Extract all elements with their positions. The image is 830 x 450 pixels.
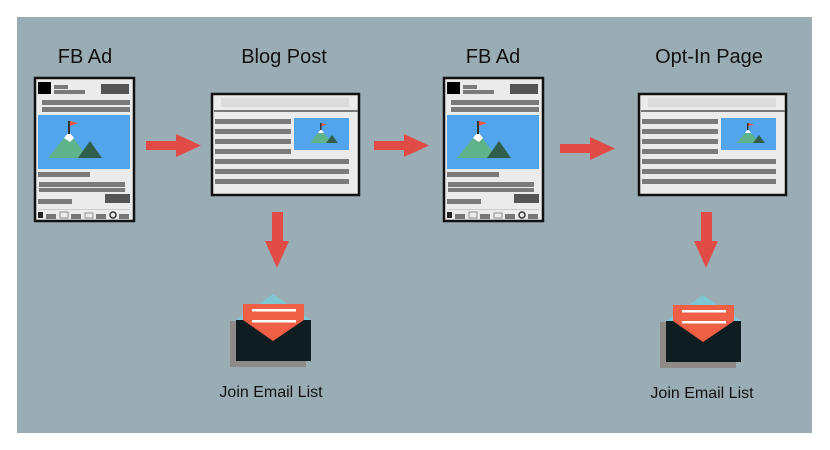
icon: FB ad mockup 2 <box>444 78 543 221</box>
label: Join Email List 1: Join Email List <box>219 384 323 401</box>
arrow down 1 <box>265 212 289 268</box>
label: Join Email List 2: Join Email List <box>650 385 754 402</box>
icon: envelope 1 <box>230 294 311 367</box>
arrow down 2 <box>694 212 718 268</box>
heading: FB Ad 2: FB Ad <box>466 46 520 68</box>
heading: Opt-In Page: Opt-In Page <box>655 46 763 68</box>
arrow 1 <box>146 134 201 157</box>
arrow 2 <box>374 134 429 157</box>
icon: blog post mockup <box>212 94 359 195</box>
icon: FB ad mockup 1 <box>35 78 134 221</box>
heading: Blog Post: Blog Post <box>241 46 327 68</box>
icon: opt-in page mockup <box>639 94 786 195</box>
arrow 3 <box>560 137 615 160</box>
icon: envelope 2 <box>660 295 741 368</box>
heading: FB Ad 1: FB Ad <box>58 46 112 68</box>
